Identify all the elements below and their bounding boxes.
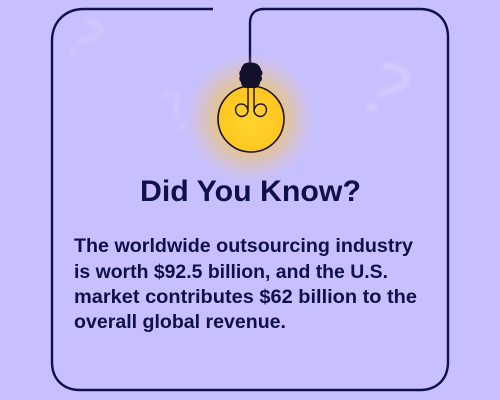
decorative question mark: center left xyxy=(162,93,186,130)
heading: Did You Know? xyxy=(140,175,361,208)
body text: market contributes $62 billion to the xyxy=(74,287,417,308)
body text xyxy=(74,236,417,333)
body text: overall global revenue. xyxy=(74,312,286,333)
bulb socket xyxy=(239,62,262,88)
body text: is worth $92.5 billion, and the U.S. xyxy=(74,262,388,283)
body text: The worldwide outsourcing industry xyxy=(74,236,413,257)
frame with cord xyxy=(52,9,448,390)
icon: light bulb xyxy=(184,52,316,184)
filament xyxy=(236,86,266,116)
bulb glow xyxy=(184,52,316,184)
bulb glass xyxy=(218,86,284,152)
decorative question mark: top left xyxy=(70,21,101,54)
decorative question mark: top right xyxy=(367,66,406,112)
